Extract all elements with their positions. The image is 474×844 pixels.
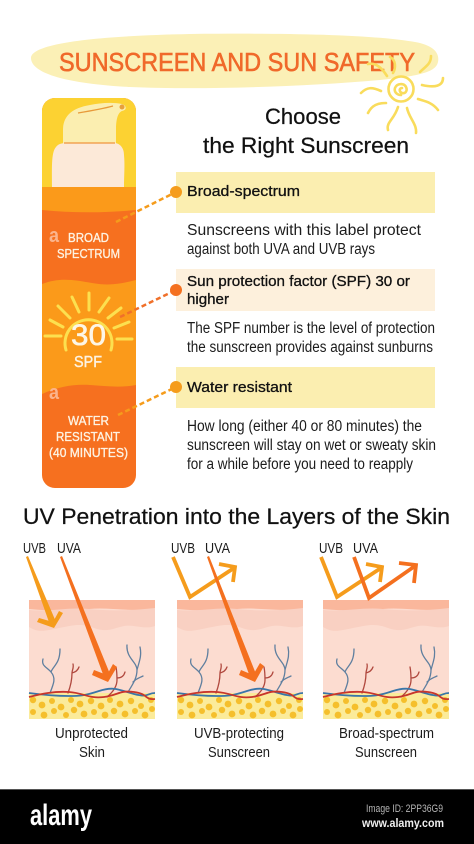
text: SPF description: The SPF number is the level of protection [187, 320, 435, 337]
callout: water resistant [118, 367, 435, 415]
arrow: UVA [207, 556, 264, 682]
arrow: UVB reflected [321, 557, 382, 597]
panel: UVB-protecting sunscreen: UVA [205, 540, 230, 557]
arrow: UVB [26, 556, 63, 628]
footer bar: www.alamy.com [361, 816, 444, 830]
panel: unprotected skin: UVB [23, 540, 46, 557]
panel: broad-spectrum sunscreen: UVA [353, 540, 378, 557]
text: water resistant description: sunscreen will stay on wet or sweaty skin [187, 437, 436, 454]
text: water resistant description: How long (either 40 or 80 minutes) the [187, 418, 422, 435]
watermark: letter a lower: a [49, 382, 60, 404]
callout: broad-spectrum: Broad-spectrum [187, 183, 300, 200]
bottle label: water resistant [49, 413, 128, 460]
panel: unprotected skin: Unprotected [55, 725, 128, 742]
text: SPF description: the sunscreen provides against sunburns [187, 339, 433, 356]
footer bar: alamy [30, 799, 92, 832]
heading: choose the right sunscreen: the Right Sunscreen [203, 133, 409, 158]
panel: broad-spectrum sunscreen [319, 540, 449, 761]
icon: sun with spiral [361, 56, 443, 133]
arrow: UVA reflected [354, 557, 416, 598]
panel: unprotected skin [23, 540, 155, 761]
callout: water resistant: Water resistant [187, 379, 293, 396]
arrow: UVA [60, 556, 117, 682]
bottle body [42, 98, 136, 488]
text: broad-spectrum description: against both UVA and UVB rays [187, 241, 375, 258]
callout: sun protection factor: higher [187, 291, 229, 308]
text: broad-spectrum description: Sunscreens with this label protect [187, 222, 422, 239]
icon: sun 30 SPF: 30 [71, 319, 106, 352]
panel: broad-spectrum sunscreen: UVB [319, 540, 343, 557]
footer bar: Image ID: 2PP36G9 [366, 803, 443, 815]
arrow: UVB reflected [173, 557, 235, 597]
heading: UV penetration: UV Penetration into the Layers of the Skin [23, 504, 450, 529]
bottle pump [52, 103, 126, 187]
icon: sun 30 SPF: SPF [74, 354, 102, 371]
panel: unprotected skin: Skin [79, 744, 105, 761]
panel: UVB-protecting sunscreen: UVB [171, 540, 195, 557]
callout: sun protection factor [120, 269, 435, 317]
title banner [31, 34, 438, 88]
callout: sun protection factor: Sun protection factor (SPF) 30 or [187, 273, 410, 290]
callout: broad-spectrum [116, 172, 435, 222]
bottle label: broad spectrum [57, 230, 120, 261]
panel: broad-spectrum sunscreen: Broad-spectrum [339, 725, 434, 742]
text: SPF description [187, 320, 435, 356]
panel: UVB-protecting sunscreen: Sunscreen [208, 744, 270, 761]
panel: broad-spectrum sunscreen: Sunscreen [355, 744, 417, 761]
title: SUNSCREEN AND SUN SAFETY [59, 47, 415, 77]
bottle label: broad spectrum: SPECTRUM [57, 246, 120, 261]
heading: choose the right sunscreen [203, 104, 409, 158]
panel: sunscreen bottle [42, 98, 136, 488]
bottle label: water resistant: WATER [68, 413, 109, 428]
watermark: letter a upper: a [49, 225, 60, 247]
bottle label: water resistant: (40 MINUTES) [49, 445, 128, 460]
text: water resistant description: for a while before you need to reapply [187, 456, 413, 473]
icon: sun 30 SPF [45, 293, 132, 371]
panel: UVB-protecting sunscreen [171, 540, 303, 761]
bottle label: broad spectrum: BROAD [68, 230, 109, 245]
text: water resistant description [187, 418, 436, 473]
panel: unprotected skin: UVA [57, 540, 81, 557]
bottle label: water resistant: RESISTANT [56, 429, 120, 444]
text: broad-spectrum description [187, 222, 422, 258]
heading: choose the right sunscreen: Choose [265, 104, 341, 129]
panel: UVB-protecting sunscreen: UVB-protecting [194, 725, 284, 742]
footer bar [0, 789, 474, 844]
